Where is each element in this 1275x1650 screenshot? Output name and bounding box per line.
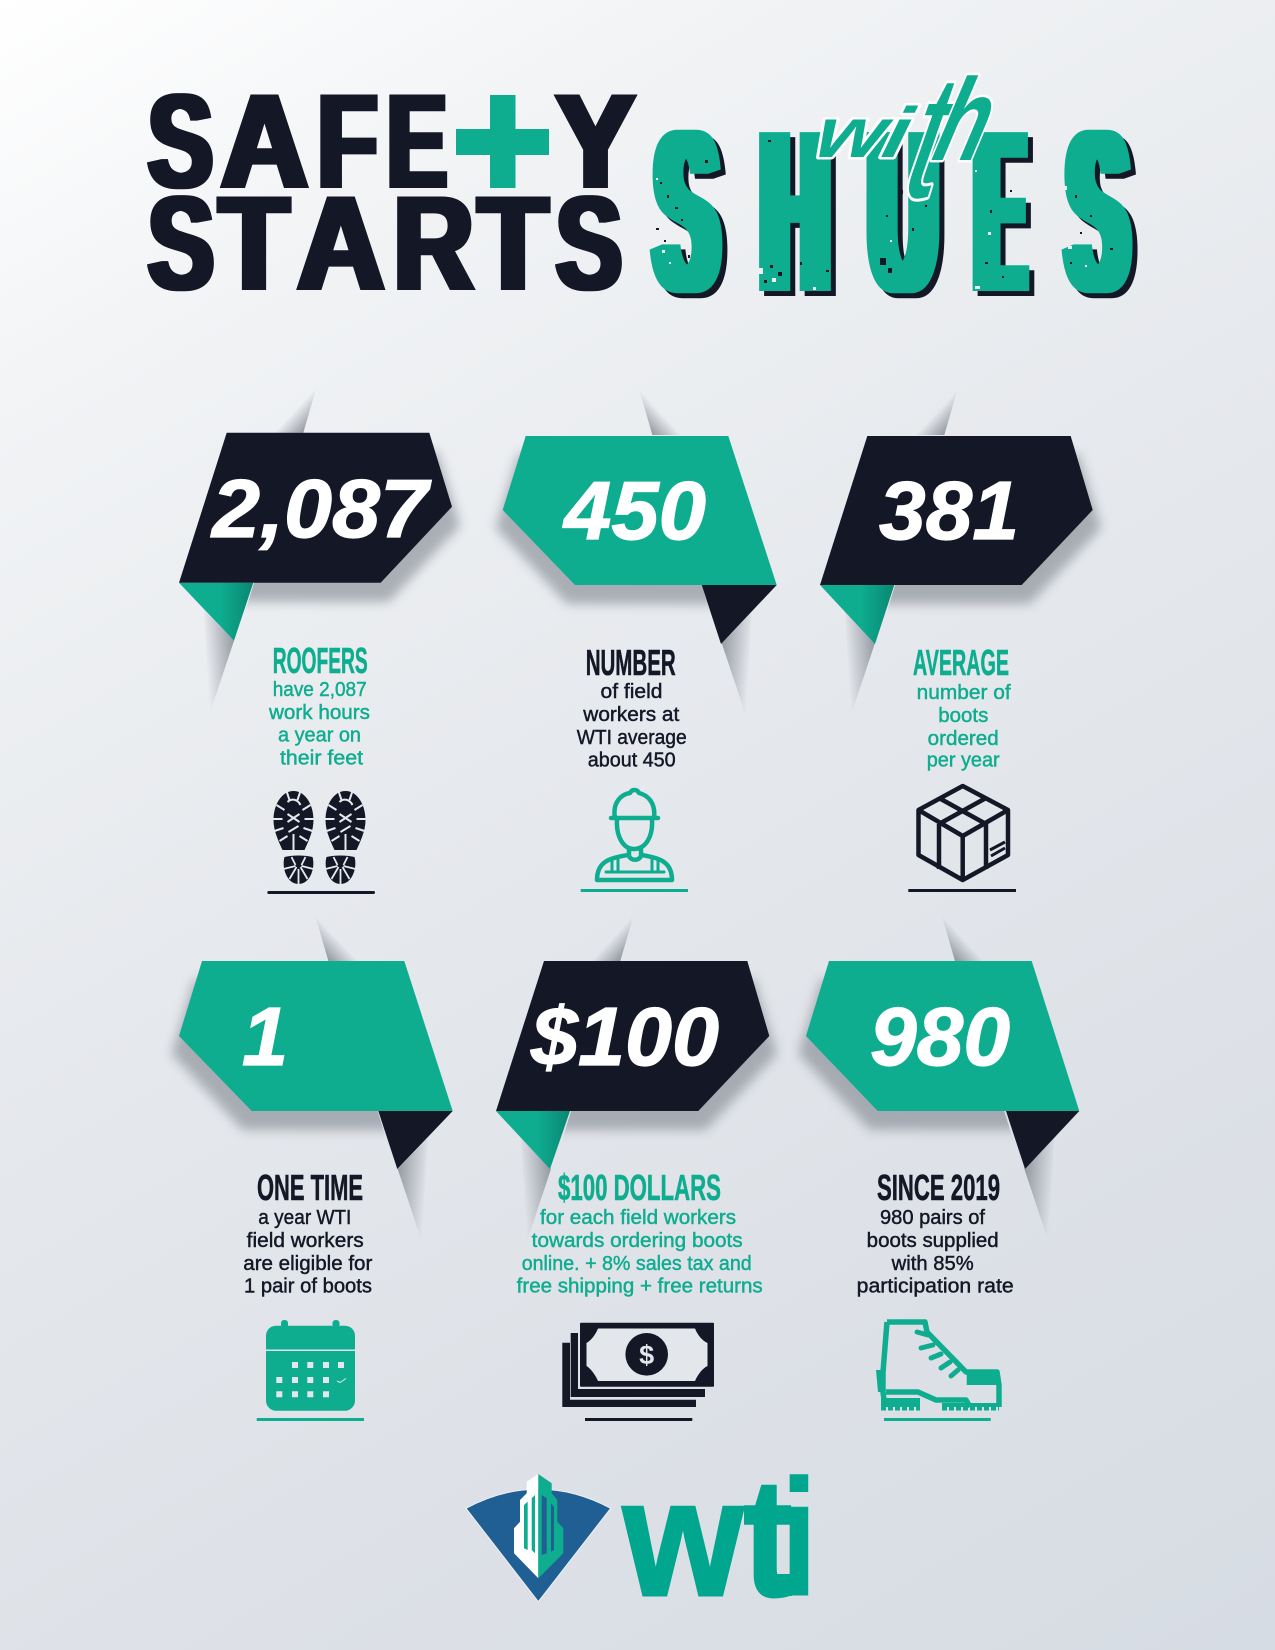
description: work hours — [268, 702, 370, 724]
title: distressed SHOES — [656, 82, 1127, 340]
heading line: SAFETY — [148, 68, 635, 216]
panel: roofers — [179, 387, 460, 894]
description — [577, 681, 687, 772]
description: their feet — [280, 748, 363, 770]
description: boots supplied — [867, 1230, 999, 1252]
description: are eligible for — [243, 1253, 373, 1275]
number $100: $100 — [530, 990, 719, 1083]
heading line: SAFETY: A — [221, 68, 308, 216]
description: boots — [938, 705, 988, 727]
description: field workers — [247, 1230, 364, 1252]
ribbon banner — [179, 387, 460, 713]
title: safety starts — [148, 68, 635, 318]
heading: SINCE 2019 — [877, 1167, 1000, 1208]
description: number of — [917, 682, 1011, 704]
logo wordmark — [622, 1446, 817, 1631]
description: of field — [600, 681, 662, 703]
text: S — [1068, 82, 1127, 340]
heading: ONE TIME — [257, 1167, 363, 1208]
description: WTI average — [577, 727, 687, 749]
logo wordmark: t — [744, 1446, 792, 1631]
description: 1 pair of boots — [244, 1276, 372, 1298]
panel: one time — [172, 915, 453, 1421]
number 980: 980 — [870, 990, 1010, 1083]
ribbon banner — [496, 915, 777, 1241]
heading line: SAFETY: F — [318, 68, 378, 216]
description: per year — [927, 750, 1000, 772]
heading line: SAFETY: S — [148, 68, 213, 216]
icon: stack of money — [562, 1323, 714, 1421]
description: online. + 8% sales tax and — [522, 1253, 752, 1275]
heading line: STARTS: S — [148, 170, 214, 318]
heading line: STARTS — [148, 170, 622, 318]
ribbon banner — [172, 915, 453, 1241]
heading: AVERAGE — [913, 642, 1009, 683]
description — [268, 679, 370, 770]
ribbon banner — [798, 915, 1079, 1241]
description: with 85% — [891, 1253, 974, 1275]
heading line: STARTS: T — [478, 170, 548, 318]
ribbon banner — [496, 389, 777, 715]
heading line: SAFETY: E — [387, 68, 447, 216]
icon: stack of money: $ — [639, 1340, 654, 1370]
logo: wti — [466, 1446, 817, 1631]
description — [517, 1207, 763, 1298]
description: a year on — [278, 724, 361, 746]
description: 980 pairs of — [880, 1207, 985, 1229]
heading line: STARTS: S — [556, 170, 622, 318]
heading: $100 DOLLARS — [558, 1167, 721, 1208]
number 1: 1 — [242, 990, 288, 1083]
description: a year WTI — [258, 1207, 351, 1229]
panel: 100 dollars — [496, 915, 777, 1421]
title: script word with: wi — [808, 94, 922, 173]
heading line: STARTS: T — [219, 170, 289, 318]
logo wordmark: i — [781, 1446, 817, 1631]
panel: number of workers — [496, 389, 777, 892]
logo mark: building in fan — [466, 1474, 611, 1602]
description: for each field workers — [540, 1207, 736, 1229]
description: workers at — [582, 704, 680, 726]
title: distressed SHOES: H — [762, 82, 828, 340]
title: script word with: t — [893, 37, 973, 235]
icon: work boot — [876, 1322, 1001, 1421]
icon: cardboard box — [908, 786, 1016, 892]
title: distressed SHOES: U — [870, 82, 936, 340]
description: participation rate — [857, 1276, 1014, 1298]
heading: ROOFERS — [273, 640, 368, 681]
title: distressed SHOES: E — [977, 82, 1023, 340]
number 2,087: 2,087 — [210, 462, 432, 555]
icon: calendar — [257, 1320, 364, 1421]
heading line: STARTS: A — [297, 170, 384, 318]
icon: boot prints — [267, 791, 375, 894]
heading: NUMBER — [586, 642, 676, 683]
description — [243, 1207, 373, 1298]
heading line: STARTS: R — [394, 170, 474, 318]
description: have 2,087 — [273, 679, 367, 701]
panel: average boots — [820, 389, 1101, 892]
title: distressed SHOES: S — [656, 82, 717, 340]
number 381: 381 — [879, 464, 1019, 557]
title: script word with — [808, 37, 1010, 235]
description: ordered — [928, 728, 999, 750]
title: script word with: h — [923, 55, 1010, 186]
icon: construction worker — [581, 790, 688, 892]
logo wordmark: w — [622, 1446, 744, 1631]
panel: since 2019 — [798, 915, 1079, 1421]
description — [917, 682, 1011, 772]
description: towards ordering boots — [532, 1230, 743, 1252]
description — [857, 1207, 1014, 1298]
heading line: SAFETY: Y — [556, 68, 635, 216]
number 450: 450 — [562, 464, 706, 557]
description: free shipping + free returns — [517, 1276, 763, 1298]
description: about 450 — [588, 750, 676, 772]
ribbon banner — [820, 389, 1101, 715]
